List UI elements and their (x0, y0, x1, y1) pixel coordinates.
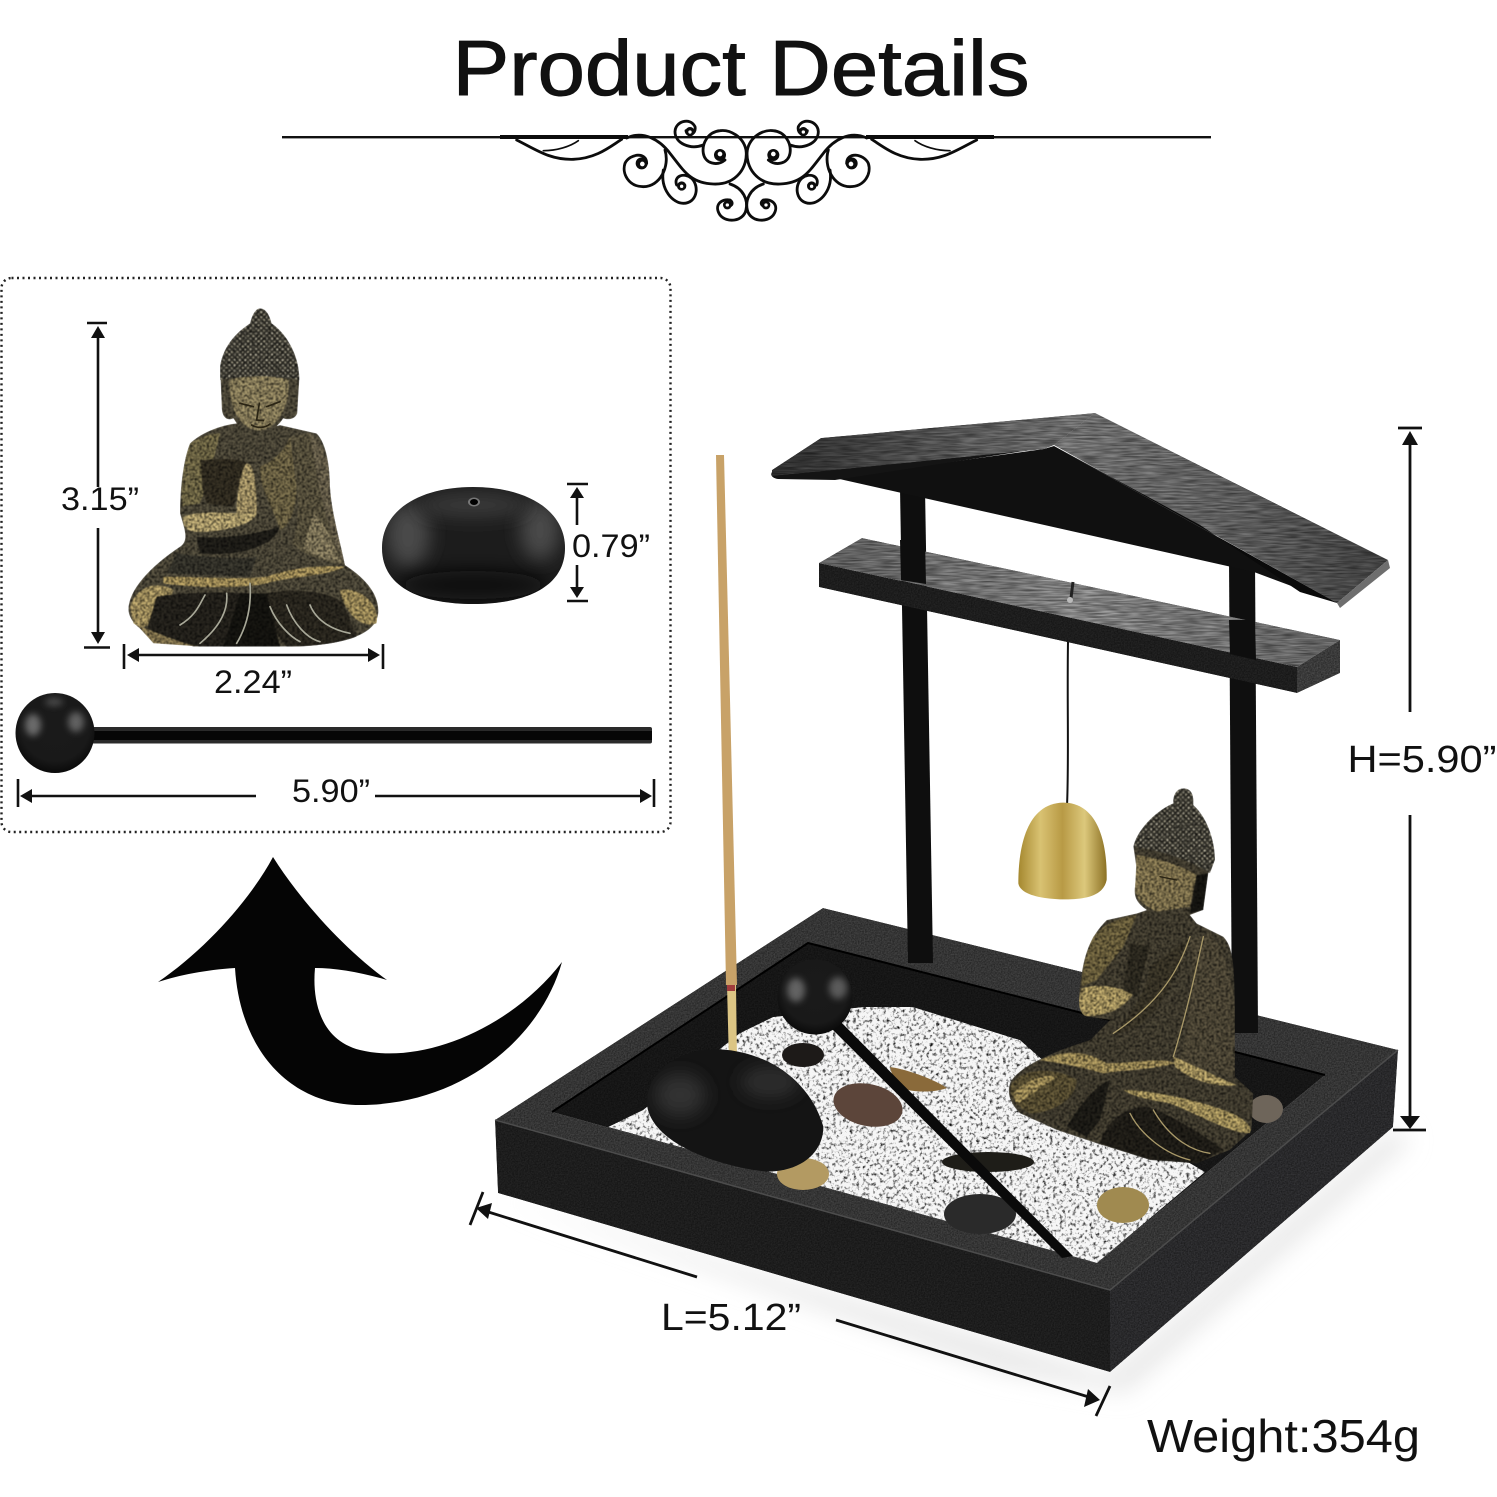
dimension: 2.24 width (124, 644, 383, 700)
incense stick (716, 455, 737, 1063)
dimension: length 5.12: L=5.12” (661, 1297, 801, 1339)
dimension: 5.90 length: 5.90” (292, 773, 370, 809)
dimension: height 5.90 (1348, 428, 1496, 1130)
brass bell (1018, 803, 1107, 899)
left post (900, 488, 933, 963)
bell hook and cord (1067, 582, 1073, 806)
dimension: 3.15 height (61, 323, 139, 648)
incense stone (647, 1049, 823, 1172)
white gravel (608, 1007, 1205, 1263)
dimension: length 5.12 (470, 1192, 1110, 1416)
dimension: 2.24 width: 2.24” (214, 664, 292, 700)
tray (495, 908, 1398, 1372)
dimension: 0.79 height (567, 484, 650, 601)
buddha figurine (128, 308, 378, 647)
weight label: Weight:354g (1147, 1410, 1420, 1462)
panel: component dimensions (2, 278, 670, 832)
incense holder stone (382, 487, 565, 604)
dimension: 3.15 height: 3.15” (61, 481, 139, 517)
pebbles (777, 1043, 1283, 1234)
roof (771, 413, 1390, 608)
seated buddha (1009, 788, 1253, 1163)
dimension: 5.90 length (18, 773, 654, 809)
dimension: height 5.90: H=5.90” (1348, 739, 1496, 781)
striker mallet (16, 693, 652, 773)
crossbar (819, 538, 1340, 693)
title: Product Details (452, 24, 1030, 112)
ornamental divider (282, 121, 1211, 220)
product: zen garden assembly (495, 413, 1410, 1392)
curved arrow (158, 857, 562, 1105)
right post (1229, 560, 1258, 1033)
striker rod (823, 1013, 1073, 1258)
dimension: 0.79 height: 0.79” (572, 528, 650, 564)
striker ball (778, 960, 852, 1034)
